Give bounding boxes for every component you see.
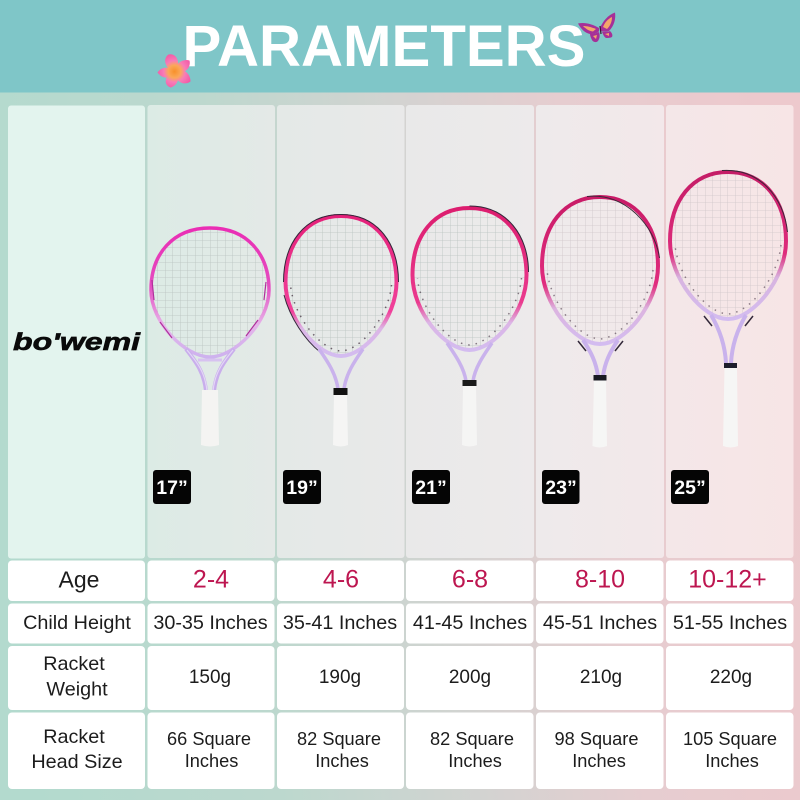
size label 19: 19” bbox=[286, 477, 318, 499]
table: age row: Age bbox=[59, 566, 99, 592]
size label 23 bbox=[542, 470, 580, 504]
table: racket weight row: 210g bbox=[580, 667, 622, 688]
panel: 19 inch racket bbox=[277, 105, 404, 558]
panel: brand column bbox=[8, 106, 145, 558]
table: age row: 6-8 bbox=[452, 566, 488, 594]
table: racket head size row: Head Size bbox=[31, 751, 123, 773]
table: age row: 2-4 bbox=[193, 566, 229, 594]
icon: 25 inch racket bbox=[670, 170, 788, 447]
table: racket head size row: 66 Square bbox=[167, 729, 251, 749]
size label 25 bbox=[671, 470, 709, 504]
icon: butterfly bbox=[578, 12, 615, 42]
size label 21 bbox=[412, 470, 450, 504]
header band bbox=[0, 0, 800, 92]
table: racket weight row: Weight bbox=[46, 678, 108, 700]
size label 17: 17” bbox=[156, 477, 188, 499]
table: racket head size row: Inches bbox=[185, 751, 238, 771]
title: PARAMETERS bbox=[182, 14, 586, 79]
icon: 23 inch racket bbox=[542, 196, 660, 448]
table: racket weight row: 190g bbox=[319, 667, 361, 688]
table: child height row bbox=[8, 604, 794, 644]
panel: 23 inch racket bbox=[536, 105, 664, 558]
brand logo: bo'wemi bbox=[13, 328, 141, 355]
icon: flower bbox=[158, 54, 190, 88]
table: racket weight row: 200g bbox=[449, 667, 491, 688]
table: racket head size row: Inches bbox=[315, 751, 369, 771]
table: child height row: 45-51 Inches bbox=[543, 612, 657, 634]
table: racket head size row bbox=[8, 712, 794, 789]
table: racket head size row: 82 Square bbox=[430, 729, 514, 749]
table: child height row: 35-41 Inches bbox=[283, 612, 397, 634]
panel: 25 inch racket bbox=[666, 105, 794, 558]
table: racket weight row: Racket bbox=[43, 653, 105, 675]
table: age row: 10-12+ bbox=[688, 566, 767, 594]
table: age row bbox=[8, 560, 794, 601]
icon: 21 inch racket bbox=[412, 206, 528, 446]
panel: 17 inch racket bbox=[148, 105, 275, 558]
icon: 17 inch racket bbox=[151, 228, 269, 446]
table: age row: 4-6 bbox=[323, 566, 359, 594]
table: racket head size row: 82 Square bbox=[297, 729, 381, 749]
table: child height row: 30-35 Inches bbox=[153, 612, 268, 634]
table: racket head size row: Racket bbox=[43, 726, 105, 748]
table: racket head size row: Inches bbox=[448, 751, 502, 771]
size label 21: 21” bbox=[415, 477, 447, 499]
size label 25: 25” bbox=[674, 477, 706, 499]
size label 17 bbox=[153, 470, 191, 504]
table: age row: 8-10 bbox=[575, 566, 625, 594]
table: racket weight row: 220g bbox=[710, 667, 752, 688]
size label 23: 23” bbox=[545, 477, 577, 499]
panel: 21 inch racket bbox=[406, 105, 534, 558]
table: racket head size row: Inches bbox=[572, 751, 626, 771]
table: racket head size row: 105 Square bbox=[683, 729, 777, 749]
table: child height row: 41-45 Inches bbox=[413, 612, 527, 634]
table: child height row: 51-55 Inches bbox=[673, 612, 787, 634]
size label 19 bbox=[283, 470, 321, 504]
table: racket head size row: 98 Square bbox=[555, 729, 638, 749]
table: racket weight row bbox=[8, 646, 794, 710]
table: racket weight row: 150g bbox=[189, 667, 231, 688]
table: child height row: Child Height bbox=[23, 612, 131, 634]
icon: 19 inch racket bbox=[284, 214, 398, 446]
table: racket head size row: Inches bbox=[705, 751, 759, 771]
